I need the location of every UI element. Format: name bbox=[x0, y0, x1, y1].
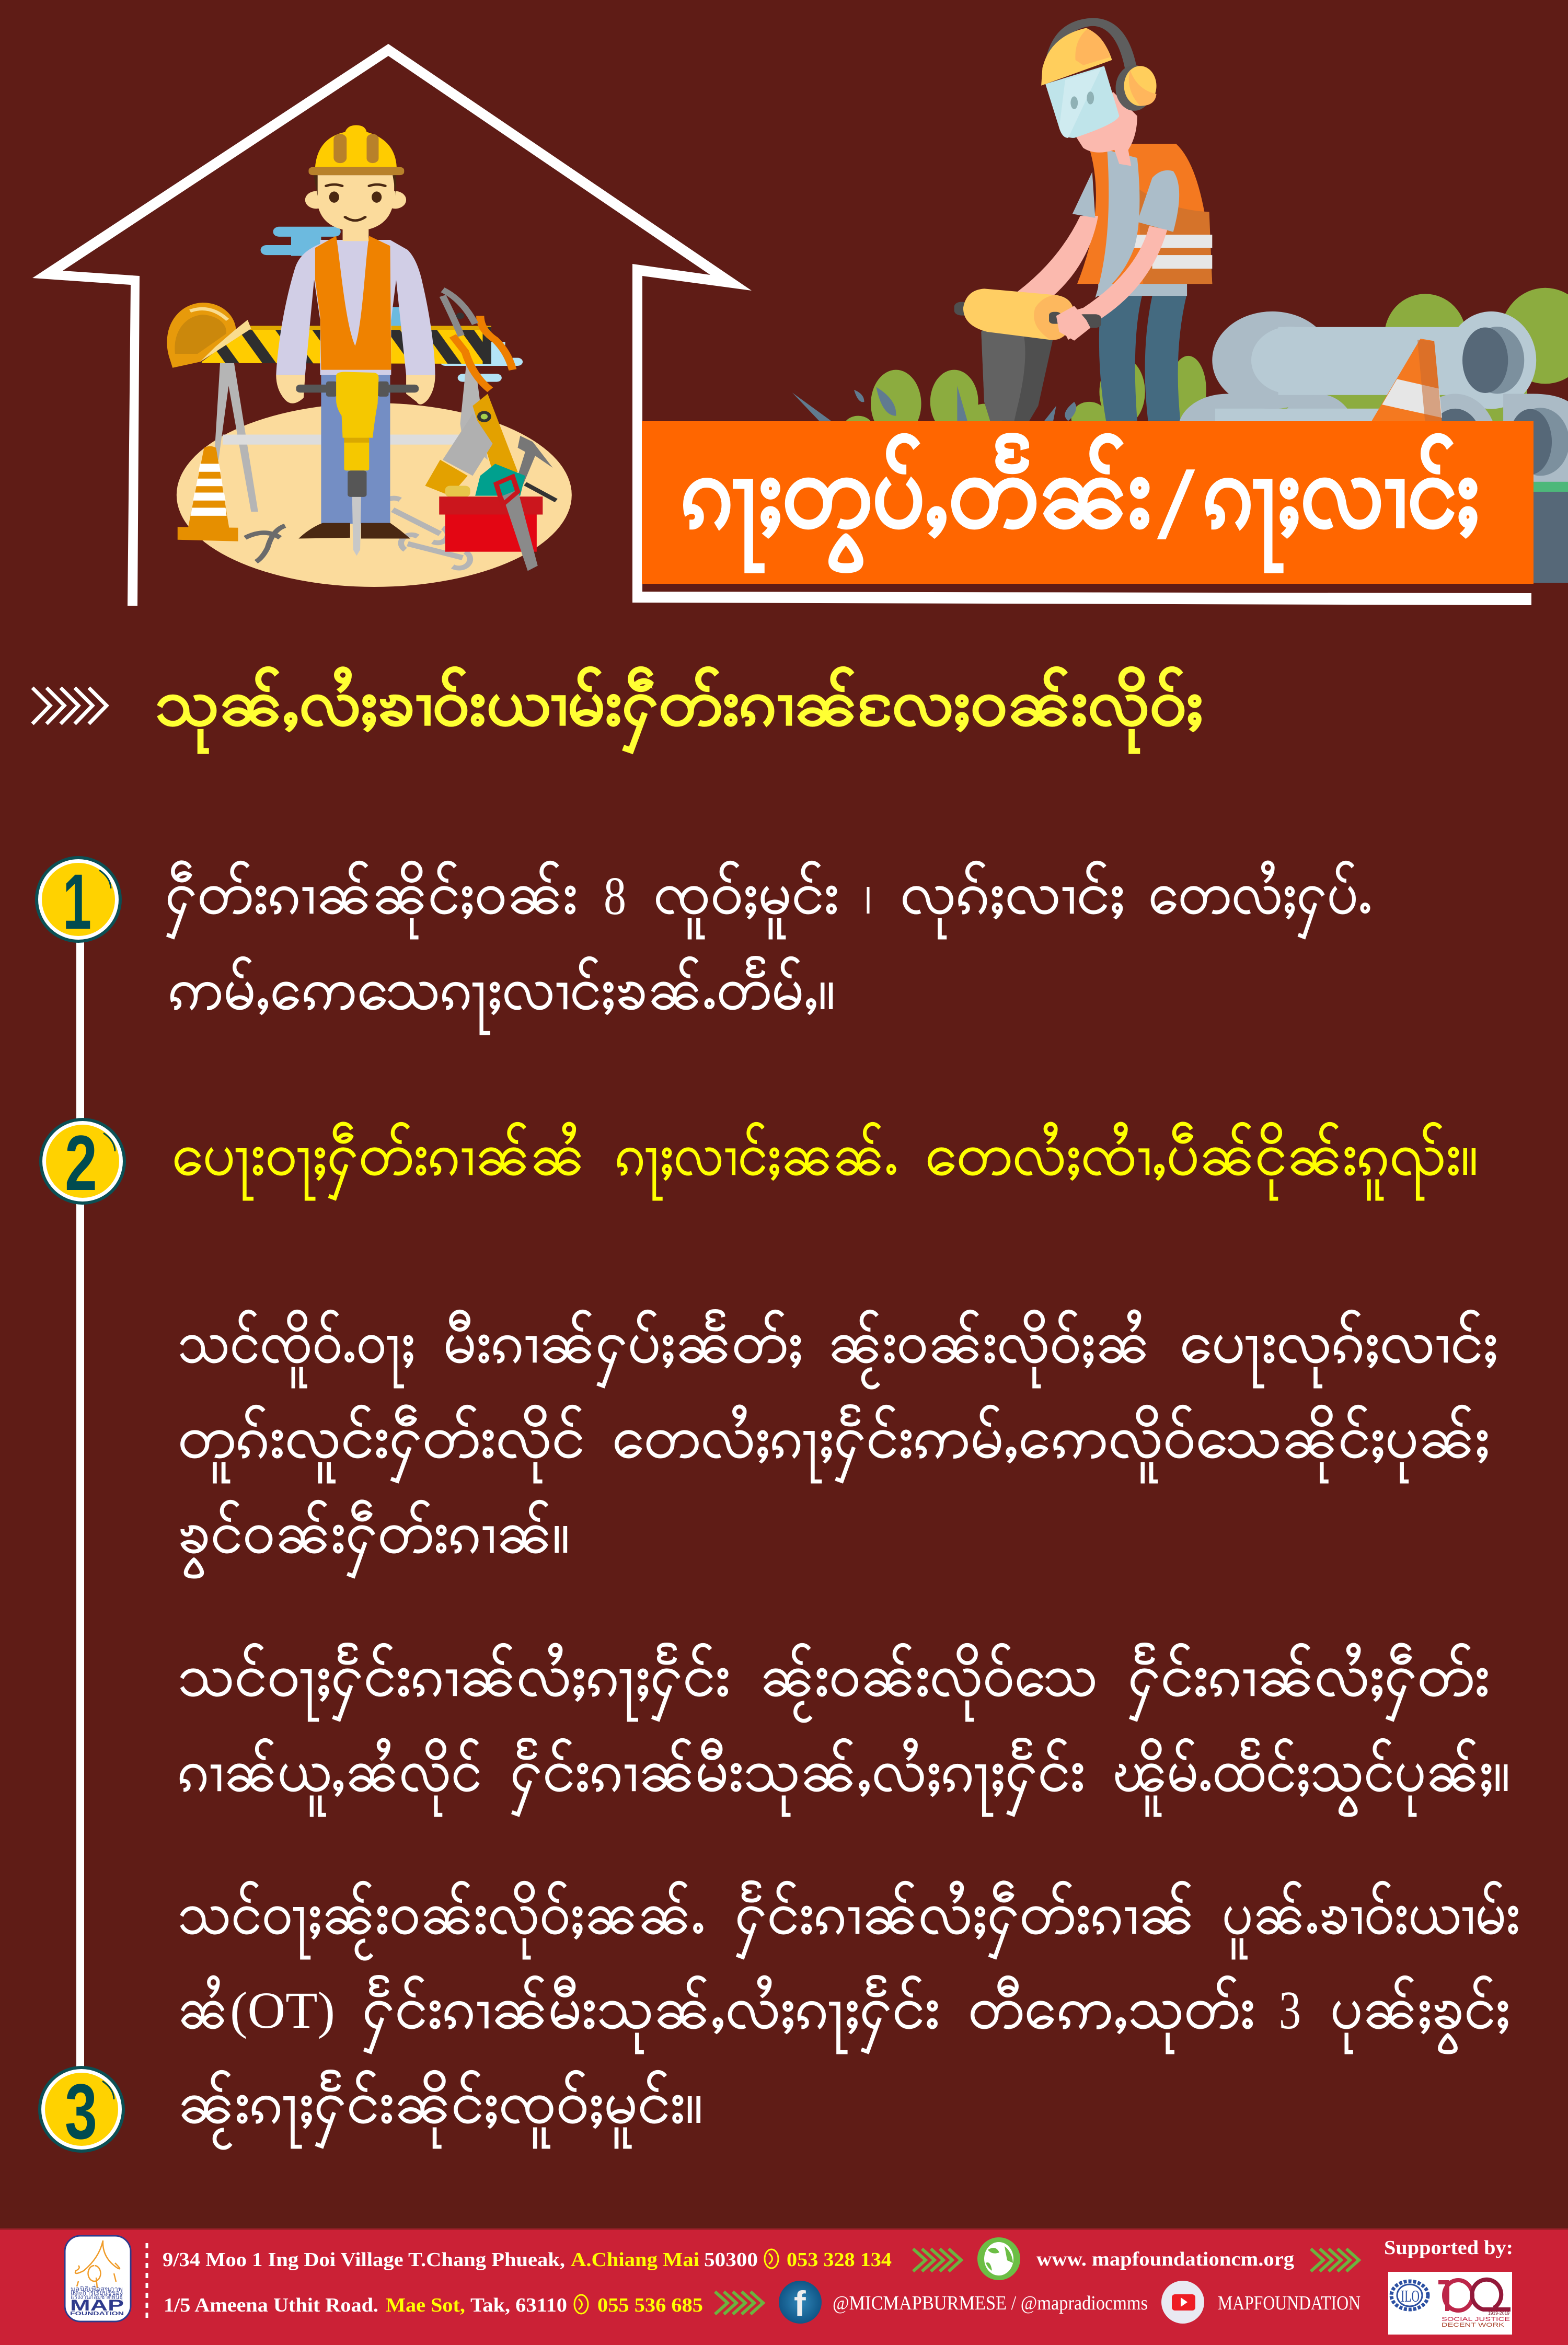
footer divider bbox=[145, 2243, 148, 2319]
step 2 text bbox=[172, 1123, 1478, 1200]
lower right pipes bbox=[1413, 394, 1568, 494]
green chevrons bbox=[913, 2249, 961, 2271]
spare helmet bbox=[167, 303, 251, 368]
heading: သုၼ်ႇလႆႈၶၢဝ်းယၢမ်းႁဵတ်းၵၢၼ်လႄႈဝၼ်းလိုဝ်ႈ bbox=[155, 666, 1203, 754]
paragraph three bbox=[178, 1881, 1520, 2149]
shirt hem bbox=[1098, 282, 1187, 296]
youtube channel: MAPFOUNDATION bbox=[1218, 2292, 1361, 2314]
title banner bbox=[642, 421, 1534, 584]
paragraph three: ႁႅင်းၵၢၼ်လႆႈႁဵတ်းၵၢၼ် bbox=[735, 1881, 1195, 1959]
trousers bbox=[1099, 296, 1186, 421]
head bbox=[305, 175, 406, 241]
paragraph three: 3 bbox=[1279, 1980, 1301, 2040]
paragraph three: ၼႆ bbox=[178, 1976, 228, 2041]
barrier legs bbox=[214, 363, 488, 512]
step 2 badge: 2 bbox=[65, 1119, 97, 1207]
worker legs bbox=[321, 374, 390, 524]
step 1 text: တေလႆႈႁပ်ႉ bbox=[1148, 861, 1372, 939]
paragraph two: ႁႅင်းၵၢၼ်မီးသုၼ်ႇလႆႈၵႃႈႁႅင်း bbox=[510, 1739, 1085, 1817]
neck and face bbox=[1065, 92, 1137, 166]
paragraph two: ႁႅင်းၵၢၼ်လႆႈႁဵတ်း bbox=[1128, 1644, 1490, 1722]
slash: / bbox=[1157, 446, 1195, 561]
ILO centenary logo: 1919-2019 bbox=[1488, 2311, 1510, 2316]
light blue dashes bbox=[440, 342, 523, 382]
chevrons bbox=[32, 688, 107, 724]
address Chiang Mai: 053 328 134 bbox=[787, 2249, 892, 2271]
bushes bbox=[843, 288, 1568, 440]
address Mae Sot: 1/5 Ameena Uthit Road. bbox=[164, 2294, 378, 2316]
paragraph three: သင်ဝႃႈၼႂ်းဝၼ်းလိုဝ်ႈၼၼ်ႉ bbox=[178, 1881, 705, 1960]
step 1 text: ႁဵတ်းၵၢၼ်ၼိုင်ႈဝၼ်း bbox=[165, 861, 578, 939]
MAP foundation logo: มูลนิธิเพื่อสุขภาพ bbox=[71, 2284, 123, 2293]
address Chiang Mai: 50300 bbox=[704, 2249, 758, 2271]
boots bbox=[298, 523, 410, 538]
paragraph three: ၼႂ်းၵႃႈႁႅင်းၼိုင်ႈၸူဝ်ႈမူင်း။ bbox=[178, 2071, 703, 2149]
website: www. mapfoundationcm.org bbox=[1036, 2248, 1294, 2270]
step 2 text: တေလႆႈၸၢႆႇပဵၼ်ငိုၼ်းၵူၺ်း။ bbox=[925, 1123, 1478, 1200]
striped barrier bbox=[200, 326, 491, 364]
paragraph one: ၶွင်ဝၼ်းႁဵတ်းၵၢၼ်။ bbox=[178, 1500, 570, 1578]
paragraph three: ပုၼ်ႈၶွင်ႈ bbox=[1330, 1976, 1510, 2053]
paragraph one: ၼႂ်းဝၼ်းလိုဝ်ႈၼႆ bbox=[828, 1310, 1150, 1389]
step 2 text: ၵႃႈလၢင်ႈၼၼ်ႉ bbox=[615, 1123, 898, 1200]
paragraph one: သင်ၸိူဝ်ႉဝႃႈ bbox=[178, 1310, 415, 1388]
MAP foundation logo: และการเรียนรู้ของ bbox=[71, 2289, 123, 2297]
pliers bbox=[245, 526, 285, 562]
barrier crossbar bbox=[223, 435, 463, 445]
address Mae Sot: Mae Sot, bbox=[386, 2294, 465, 2316]
house outline bbox=[32, 44, 1531, 606]
step 1 badge bbox=[37, 858, 120, 945]
step 1 badge: 1 bbox=[63, 858, 91, 945]
wrenches bbox=[393, 510, 463, 558]
supported by: Supported by: bbox=[1384, 2237, 1513, 2259]
street base bbox=[1533, 482, 1568, 583]
paragraph two bbox=[178, 1644, 1510, 1817]
step 1 text: ၊ bbox=[865, 861, 871, 926]
wrench ends bbox=[383, 498, 470, 568]
hands bbox=[276, 375, 435, 405]
facebook icon: f bbox=[794, 2284, 806, 2324]
headband bbox=[1050, 22, 1131, 70]
MAP foundation logo: FOUNDATION bbox=[70, 2311, 124, 2317]
ILO centenary logo bbox=[1388, 2272, 1512, 2335]
social handles: @MICMAPBURMESE / @mapradiocmms bbox=[833, 2292, 1148, 2314]
ILO emblem bbox=[1391, 2281, 1428, 2309]
MAP foundation logo bbox=[65, 2236, 131, 2321]
red-handled saw bbox=[496, 477, 538, 571]
paragraph one bbox=[178, 1310, 1498, 1578]
safety vest bbox=[315, 236, 391, 370]
grey shirt bbox=[1073, 150, 1179, 298]
vest bbox=[1077, 144, 1212, 284]
paragraph three: တီဢေႇသုတ်း bbox=[968, 1976, 1255, 2053]
toolbox bbox=[439, 496, 543, 552]
step 3 badge: 3 bbox=[65, 2067, 97, 2155]
paragraph three: ႁႅင်းၵၢၼ်မီးသုၼ်ႇလႆႈၵႃႈႁႅင်း bbox=[362, 1976, 940, 2054]
MAP foundation logo: แรงงานกลุ่มชาติพันธุ์ bbox=[71, 2293, 123, 2301]
MAP foundation logo: MAP bbox=[70, 2297, 124, 2314]
shirt bbox=[276, 240, 435, 376]
orange cone bbox=[1370, 339, 1442, 424]
tools in toolbox bbox=[425, 394, 556, 501]
step 3 badge bbox=[40, 2067, 123, 2155]
step 2 text: ပေႃးဝႃႈႁဵတ်းၵၢၼ်ၼႆ bbox=[172, 1123, 585, 1200]
title left: ၵႃႈတွပ်ႇတႅၼ်း bbox=[681, 433, 1151, 573]
facebook icon bbox=[779, 2281, 822, 2324]
grass blades bbox=[792, 386, 1076, 421]
jackhammer bbox=[296, 372, 419, 556]
paragraph one: တေလႆႈၵႃႈႁႅင်းဢမ်ႇဢေလိူဝ်သေၼိုင်ႈပုၼ်ႈ bbox=[612, 1405, 1490, 1483]
yellow helmet bbox=[1041, 28, 1112, 86]
illustration: road worker with pipes bbox=[792, 22, 1568, 583]
paragraph two: သင်ဝႃႈႁႅင်းၵၢၼ်လႆႈၵႃႈႁႅင်း bbox=[178, 1644, 730, 1722]
ear muff bbox=[1115, 65, 1157, 111]
traffic cone bbox=[178, 446, 238, 541]
boots bbox=[981, 329, 1053, 421]
paragraph two: ၽိူမ်ႉထႅင်ႈသွင်ပုၼ်ႈ။ bbox=[1113, 1739, 1510, 1816]
upper pliers bbox=[443, 290, 513, 390]
address Mae Sot: Tak, 63110 bbox=[470, 2294, 567, 2316]
yellow hard hat bbox=[308, 125, 404, 175]
hand bbox=[1056, 306, 1090, 341]
illustration: worker with jackhammer and tools bbox=[167, 125, 572, 587]
timeline line bbox=[76, 935, 84, 2075]
100 mark bbox=[1438, 2280, 1511, 2311]
paragraph two: ၼႂ်းဝၼ်းလိုဝ်သေ bbox=[760, 1644, 1098, 1722]
youtube icon bbox=[1161, 2281, 1204, 2324]
paragraph three: ပူၼ်ႉၶၢဝ်းယၢမ်း bbox=[1222, 1881, 1520, 1959]
address Chiang Mai: A.Chiang Mai bbox=[571, 2249, 699, 2271]
ILO centenary logo: DECENT WORK bbox=[1442, 2322, 1505, 2328]
address Mae Sot: 055 536 685 bbox=[597, 2294, 703, 2316]
step 1 text: ဢမ်ႇဢေသေၵႃႈလၢင်ႈၶၼ်ႉတႅမ်ႇ။ bbox=[168, 957, 835, 1034]
paragraph two: ၵၢၼ်ယူႇၼႆလိုင် bbox=[178, 1739, 482, 1816]
step 1 text: ၸူဝ်ႈမူင်း bbox=[653, 861, 839, 939]
arm holding tool bbox=[1017, 216, 1098, 296]
ILO centenary logo: SOCIAL JUSTICE bbox=[1442, 2316, 1510, 2323]
globe icon bbox=[977, 2237, 1020, 2280]
title right: ၵႃႈလၢင်ႈ bbox=[1203, 433, 1479, 573]
green chevrons bbox=[715, 2292, 763, 2314]
green chevrons bbox=[1311, 2249, 1359, 2271]
address Chiang Mai bbox=[163, 2249, 892, 2271]
paragraph one: ပေႃးလုၵ်ႈလၢင်ႈ bbox=[1180, 1310, 1498, 1388]
paragraph three: (OT) bbox=[230, 1981, 335, 2039]
paragraph one: တူၵ်းလူင်းႁဵတ်းလိုင် bbox=[178, 1405, 585, 1483]
footer band bbox=[0, 2228, 1568, 2345]
face shield bbox=[1045, 66, 1119, 138]
step 1 text: 8 bbox=[604, 866, 626, 926]
address Mae Sot bbox=[164, 2294, 703, 2316]
step 2 badge bbox=[41, 1119, 124, 1207]
front arm bbox=[1056, 226, 1167, 340]
ILO emblem: ILO bbox=[1401, 2286, 1420, 2305]
sand ellipse bbox=[177, 403, 572, 587]
step 1 text: လုၵ်ႈလၢင်ႈ bbox=[900, 861, 1125, 939]
motion dashes bbox=[261, 227, 406, 327]
address Chiang Mai: 9/34 Moo 1 Ing Doi Village T.Chang Phueak, bbox=[163, 2249, 565, 2271]
step 1 text bbox=[165, 861, 1372, 1034]
jackhammer bbox=[954, 288, 1101, 340]
paragraph one: မီးၵၢၼ်ႁပ်ႈၼႅတ်ႈ bbox=[443, 1310, 803, 1388]
pipes bbox=[1178, 311, 1536, 466]
